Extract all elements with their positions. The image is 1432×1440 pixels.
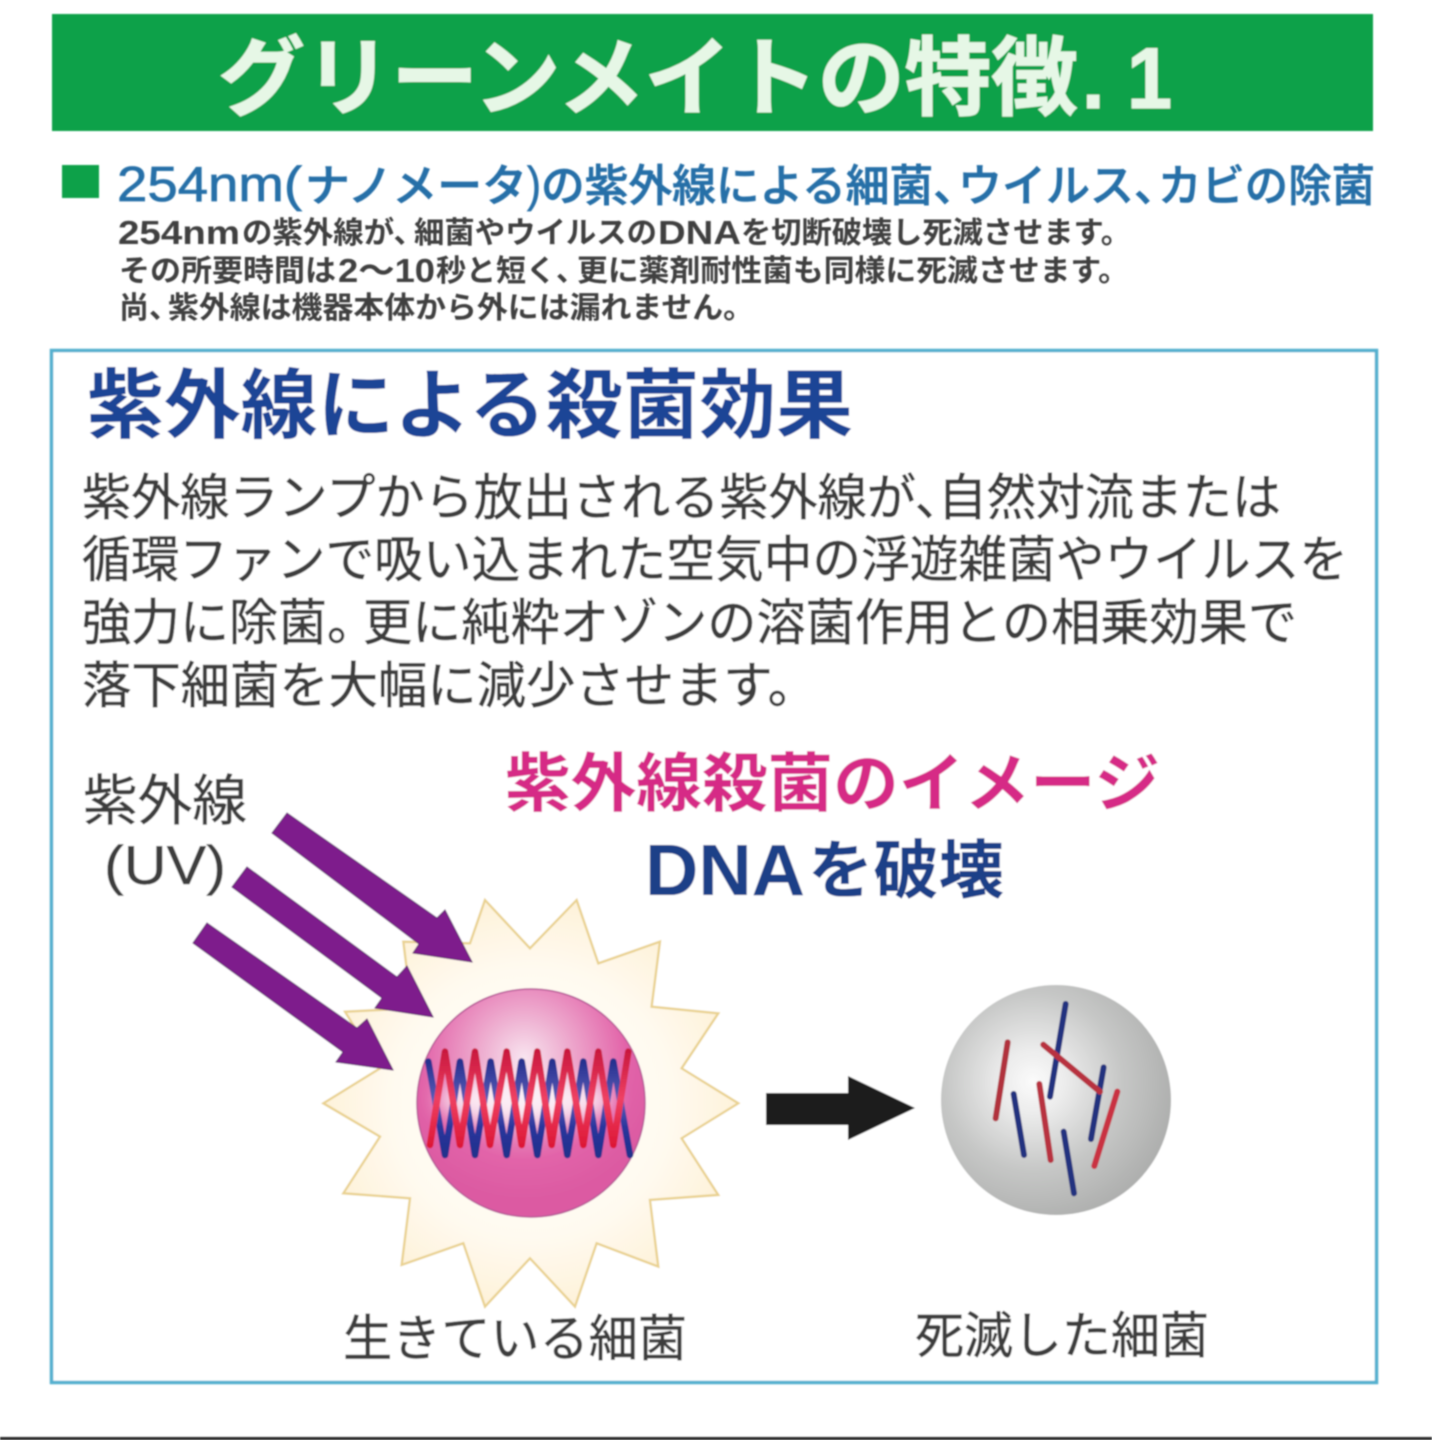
panel: UV sterilization effect [52,350,1376,1382]
description text: 秒と短く、 [436,255,586,288]
diagram heading [505,748,1160,911]
subheading: の紫外線による細菌、 [541,162,977,211]
body text: 落下細菌を大幅に減少させます。 [82,658,817,714]
description text: 2～10 [338,252,435,289]
subheading: ウイルス、 [958,162,1178,211]
label: ultraviolet [83,770,247,896]
description text: その所要時間は [119,255,336,288]
body text: 循環ファンで吸い込まれた空気中の浮遊雑菌やウイルスを [82,532,1348,588]
icon: green square bullet [62,165,99,198]
starburst [323,900,738,1307]
description text: 尚、 [119,292,179,325]
panel heading: 紫外線による殺菌効果 [87,364,853,449]
description text: DNA [658,214,741,251]
subheading: ) [527,158,541,212]
diagram heading: DNA [645,831,805,911]
description text: を切断破壊し死滅させます。 [741,217,1131,250]
cell sphere [417,989,645,1217]
gray sphere [941,985,1171,1215]
broken DNA fragments [996,1004,1117,1193]
label: ultraviolet: (UV) [104,834,226,896]
living bacterium [323,900,738,1307]
label: ultraviolet: 紫外線 [83,770,247,832]
description text: 254nm [118,214,240,251]
DNA double helix [428,1052,630,1155]
caption: dead bacterium: 死滅した細菌 [915,1308,1209,1364]
title banner: グリーンメイトの特徴 [218,31,1078,127]
arrow: black transition [766,1076,915,1140]
subheading: ナノメータ [305,162,527,211]
dead bacterium [941,985,1171,1215]
subheading: カビの除菌 [1158,162,1375,211]
description text: 細菌やウイルスの [414,217,657,250]
description text: 紫外線は機器本体から外には漏れません。 [168,292,754,325]
description text: 更に薬剤耐性菌も同様に死滅させます。 [577,255,1129,288]
body text: 紫外線ランプから放出される紫外線が、 [82,470,964,526]
description text [118,214,1131,325]
title banner: . 1 [1082,31,1172,127]
highlight behind DNA [437,1076,613,1124]
arrows: UV rays [193,813,472,1070]
diagram heading: 紫外線殺菌のイメージ [505,748,1160,820]
body text: 更に純粋オゾンの溶菌作用との相乗効果で [363,595,1297,651]
description text: の紫外線が、 [242,216,424,250]
title banner [52,14,1373,131]
body text: 自然対流または [938,470,1281,526]
diagram heading: を破壊 [808,835,1004,907]
subheading: 254nm( [117,158,303,212]
caption: living bacterium: 生きている細菌 [343,1311,687,1367]
body text [82,470,1348,714]
body text: 強力に除菌。 [82,595,376,651]
subheading [117,158,1375,212]
bottom edge bar [0,1437,1432,1440]
